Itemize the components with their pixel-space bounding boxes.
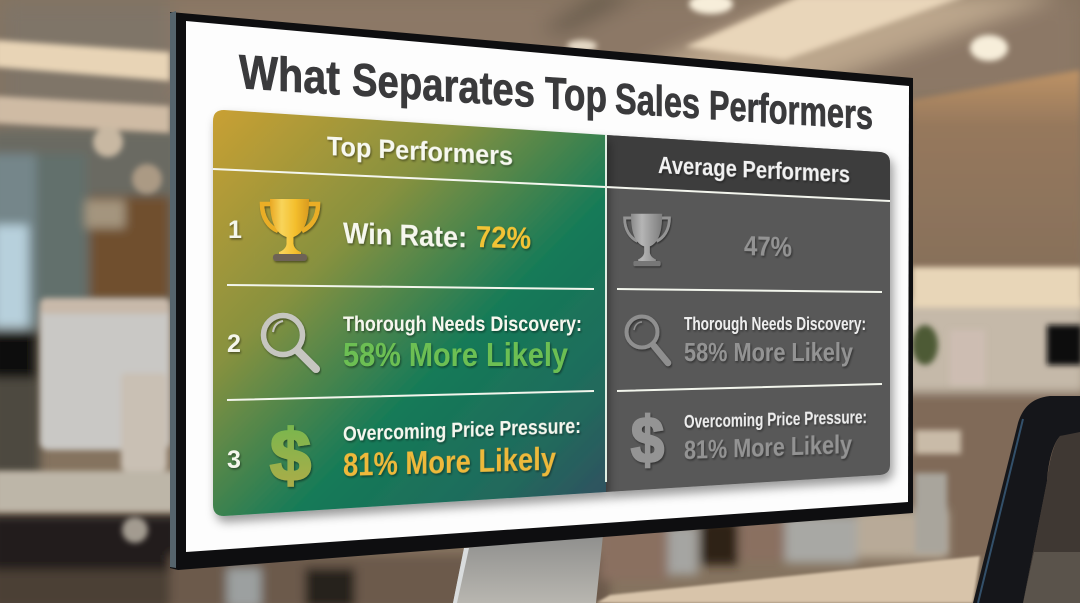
icon: dollar: $: [270, 416, 311, 496]
lower background: [0, 130, 1080, 603]
discovery label: Thorough Needs Discovery:: [343, 313, 582, 336]
panel: top performers: [213, 110, 606, 516]
row numbers: 2: [227, 330, 241, 358]
average discovery value: 58% More Likely: [684, 337, 853, 367]
column heading: average performers: Average Performers: [658, 152, 850, 189]
win rate value: 72%: [476, 219, 531, 256]
column heading: top performers: Top Performers: [327, 131, 513, 171]
discovery value: 58% More Likely: [343, 336, 569, 373]
title: [239, 46, 873, 138]
price value: 81% More Likely: [343, 441, 556, 483]
win rate label: Win Rate:: [343, 217, 467, 254]
icon: gray dollar: $: [631, 403, 664, 476]
row numbers: [227, 216, 242, 474]
title: What: [239, 46, 340, 106]
divider lines: [213, 135, 890, 482]
ceiling: [0, 0, 1080, 140]
title: Performers: [709, 82, 873, 138]
monitor screen: [186, 21, 909, 552]
price label: Overcoming Price Pressure:: [343, 415, 581, 446]
desk surface: [596, 556, 980, 603]
monitor stand: [453, 535, 603, 603]
monitor bezel: [170, 11, 913, 570]
comparison table: [213, 110, 890, 516]
average price label: Overcoming Price Pressure:: [684, 407, 867, 432]
title: Separates: [352, 53, 535, 117]
icon: gold trophy: [262, 199, 318, 261]
row numbers: 3: [227, 446, 241, 474]
wood wall: [912, 70, 1080, 270]
icon: gray magnifier: [626, 316, 668, 363]
title: Top: [545, 67, 607, 122]
icon: silver trophy: [625, 214, 669, 266]
icon: magnifier: [264, 316, 316, 369]
office chair: [973, 396, 1080, 603]
average price value: 81% More Likely: [684, 429, 852, 465]
row numbers: 1: [228, 216, 242, 244]
average discovery label: Thorough Needs Discovery:: [684, 314, 866, 334]
title: Sales: [615, 75, 700, 128]
average win rate value: 47%: [744, 230, 792, 262]
panel: average performers: [606, 135, 890, 492]
